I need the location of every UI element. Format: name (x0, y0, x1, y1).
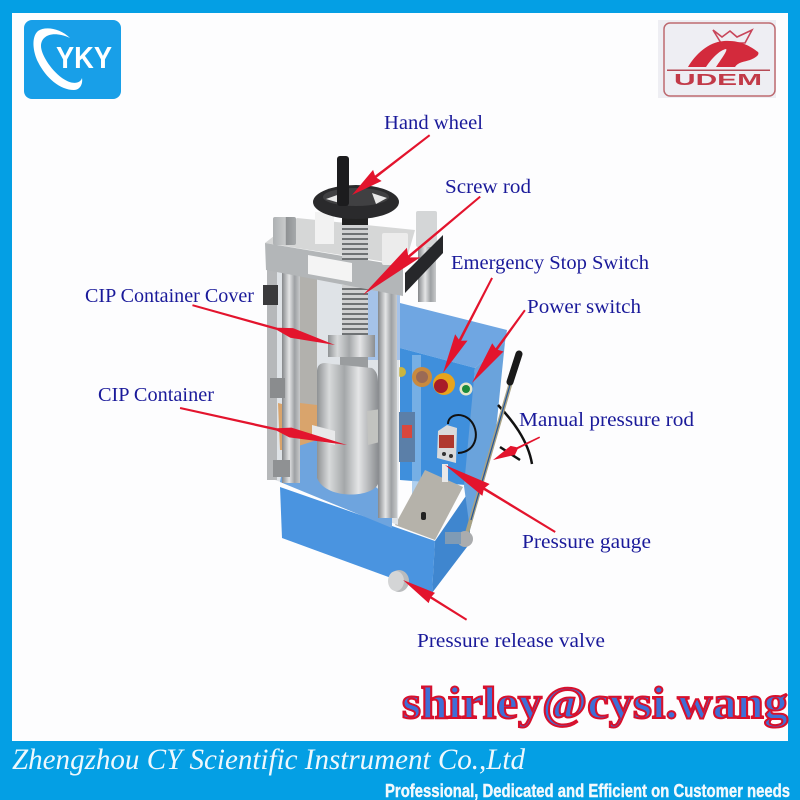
steel plate (395, 470, 463, 540)
contact email: shirley@cysi.wang (402, 677, 788, 728)
container cover (328, 335, 375, 371)
control buttons (396, 367, 472, 396)
label: CIP container cover: CIP Container Cover (85, 285, 254, 307)
control box (399, 303, 507, 530)
left column (282, 270, 300, 483)
lower screw rod (342, 285, 368, 340)
company name: Zhengzhou CY Scientific Instrument Co.,Ltd (12, 743, 526, 776)
label: emergency stop switch: Emergency Stop Switch (451, 252, 649, 274)
machine: cold isostatic press (263, 156, 532, 593)
label: manual pressure rod: Manual pressure rod (519, 409, 694, 431)
right rear column (418, 247, 436, 302)
hand wheel (313, 156, 399, 225)
arrow: hand wheel (348, 130, 434, 201)
arrow: power switch (466, 306, 531, 387)
label: power switch: Power switch (527, 296, 641, 318)
acrylic back panel (268, 265, 400, 525)
black flap (405, 235, 443, 293)
label: pressure gauge: Pressure gauge (522, 531, 651, 553)
logo: UDEM (658, 20, 776, 98)
arrow: screw rod (358, 191, 485, 301)
frame nuts (273, 211, 437, 265)
logo: YKY: YKY (56, 40, 112, 75)
manual pressure rod (445, 354, 532, 547)
arrow: emergency stop (437, 275, 498, 376)
label: pressure release valve: Pressure release valve (417, 630, 605, 652)
label: CIP container: CIP Container (98, 384, 214, 406)
logo: UDEM: UDEM (674, 72, 762, 89)
logo: YKY (24, 20, 121, 99)
label: hand wheel: Hand wheel (384, 112, 483, 134)
arrow: CIP container cover (191, 300, 336, 350)
top plate (265, 212, 415, 296)
arrow: release valve (400, 575, 470, 625)
guard latches (263, 285, 290, 477)
upper screw rod (342, 222, 368, 260)
arrow: pressure gauge (441, 459, 559, 538)
pressure gauge (437, 415, 476, 482)
right column (378, 272, 397, 518)
machine base (280, 487, 470, 593)
arrow: manual pressure rod (491, 433, 542, 464)
label: screw rod: Screw rod (445, 176, 531, 198)
container clamp (367, 408, 388, 445)
arrow: CIP container (179, 403, 348, 450)
left frame edge (267, 265, 277, 480)
CIP container (312, 363, 378, 495)
release valve knob (388, 570, 409, 592)
arrows (179, 130, 559, 625)
